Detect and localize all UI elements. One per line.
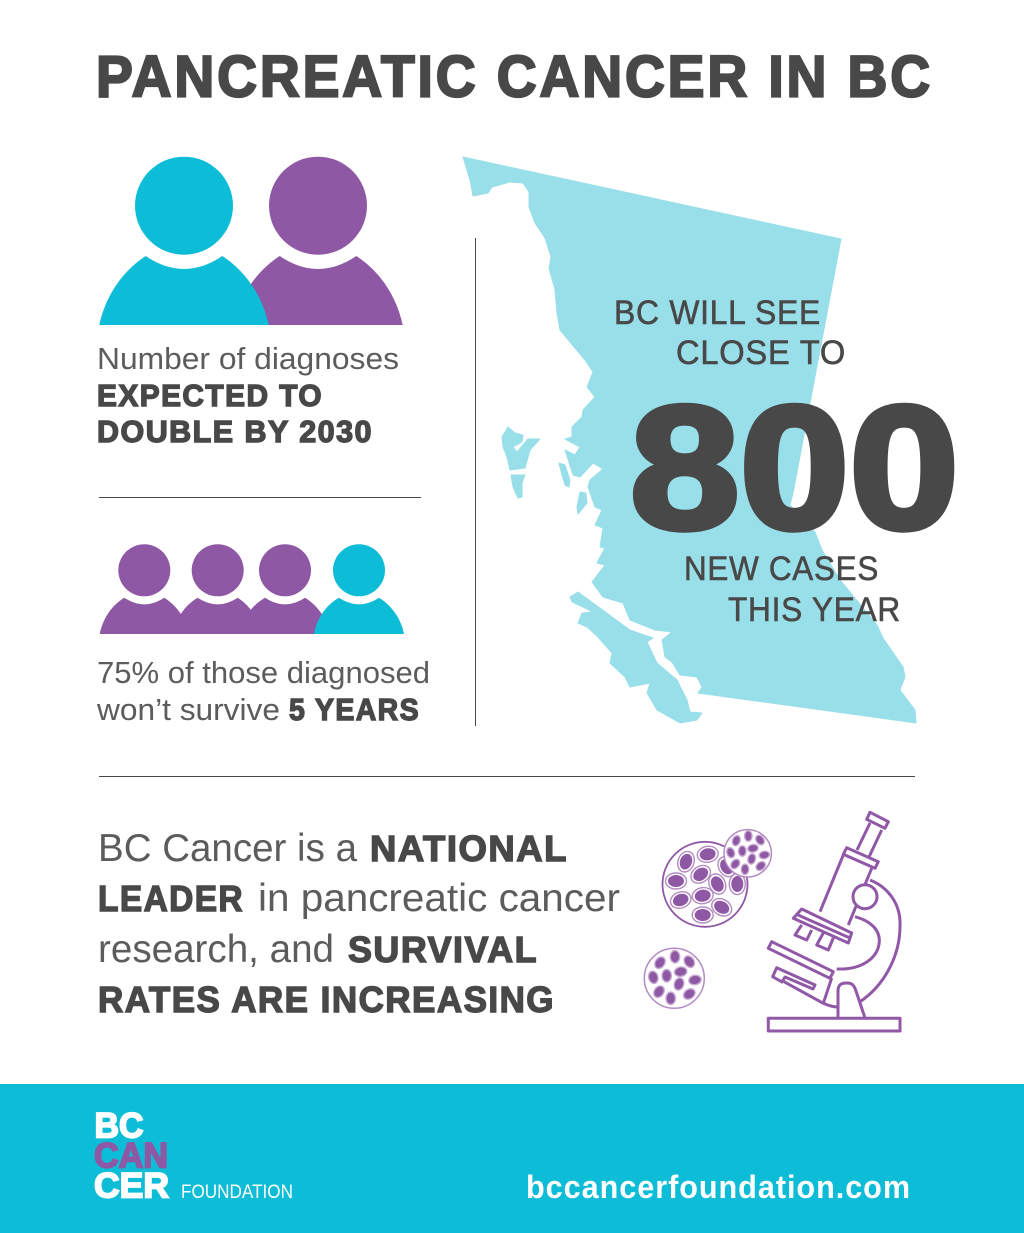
callout: 800 new cases: THIS YEAR — [728, 591, 901, 629]
callout: 800 new cases: 800 — [630, 371, 959, 566]
icon: cells — [644, 830, 771, 1008]
website url: bccancerfoundation.com — [526, 1169, 911, 1205]
text: diagnoses expected to double: EXPECTED TO — [97, 378, 323, 413]
callout: 800 new cases: CLOSE TO — [676, 334, 846, 372]
text: diagnoses expected to double — [97, 341, 399, 449]
text: BC Cancer national leader: BC Cancer is a — [98, 827, 357, 870]
text: survival statistic: 5 YEARS — [289, 692, 420, 727]
text: survival statistic: 75% of those diagnosed — [97, 655, 430, 690]
text: BC Cancer national leader: RATES ARE INCREASING — [98, 979, 555, 1020]
title: PANCREATIC CANCER IN BC — [96, 44, 933, 110]
logo: BC Cancer Foundation: CER — [94, 1166, 169, 1206]
logo: BC Cancer Foundation: CAN — [94, 1136, 168, 1176]
text: diagnoses expected to double: Number of diagnoses — [97, 341, 399, 376]
callout: 800 new cases: NEW CASES — [684, 550, 879, 588]
callout: 800 new cases — [614, 294, 959, 629]
text: BC Cancer national leader: research, and — [98, 928, 334, 971]
text: survival statistic — [96, 655, 430, 727]
icon: microscope — [768, 812, 900, 1031]
text: BC Cancer national leader: SURVIVAL — [348, 929, 538, 970]
text: BC Cancer national leader — [98, 827, 620, 1020]
logo: BC Cancer Foundation — [94, 1106, 293, 1206]
logo: BC Cancer Foundation: BC — [94, 1106, 144, 1146]
text: BC Cancer national leader: in pancreatic cancer — [258, 877, 620, 920]
logo: BC Cancer Foundation: FOUNDATION — [181, 1182, 293, 1203]
icon: two people — [99, 157, 403, 325]
text: survival statistic: won’t survive — [96, 692, 280, 727]
map of British Columbia — [463, 157, 916, 723]
dividers — [99, 238, 915, 776]
text: diagnoses expected to double: DOUBLE BY 2030 — [97, 414, 373, 449]
callout: 800 new cases: BC WILL SEE — [614, 294, 821, 332]
footer band — [0, 1084, 1024, 1233]
icon: four people — [100, 544, 404, 634]
text: BC Cancer national leader: NATIONAL — [370, 828, 568, 869]
text: BC Cancer national leader: LEADER — [98, 878, 244, 919]
